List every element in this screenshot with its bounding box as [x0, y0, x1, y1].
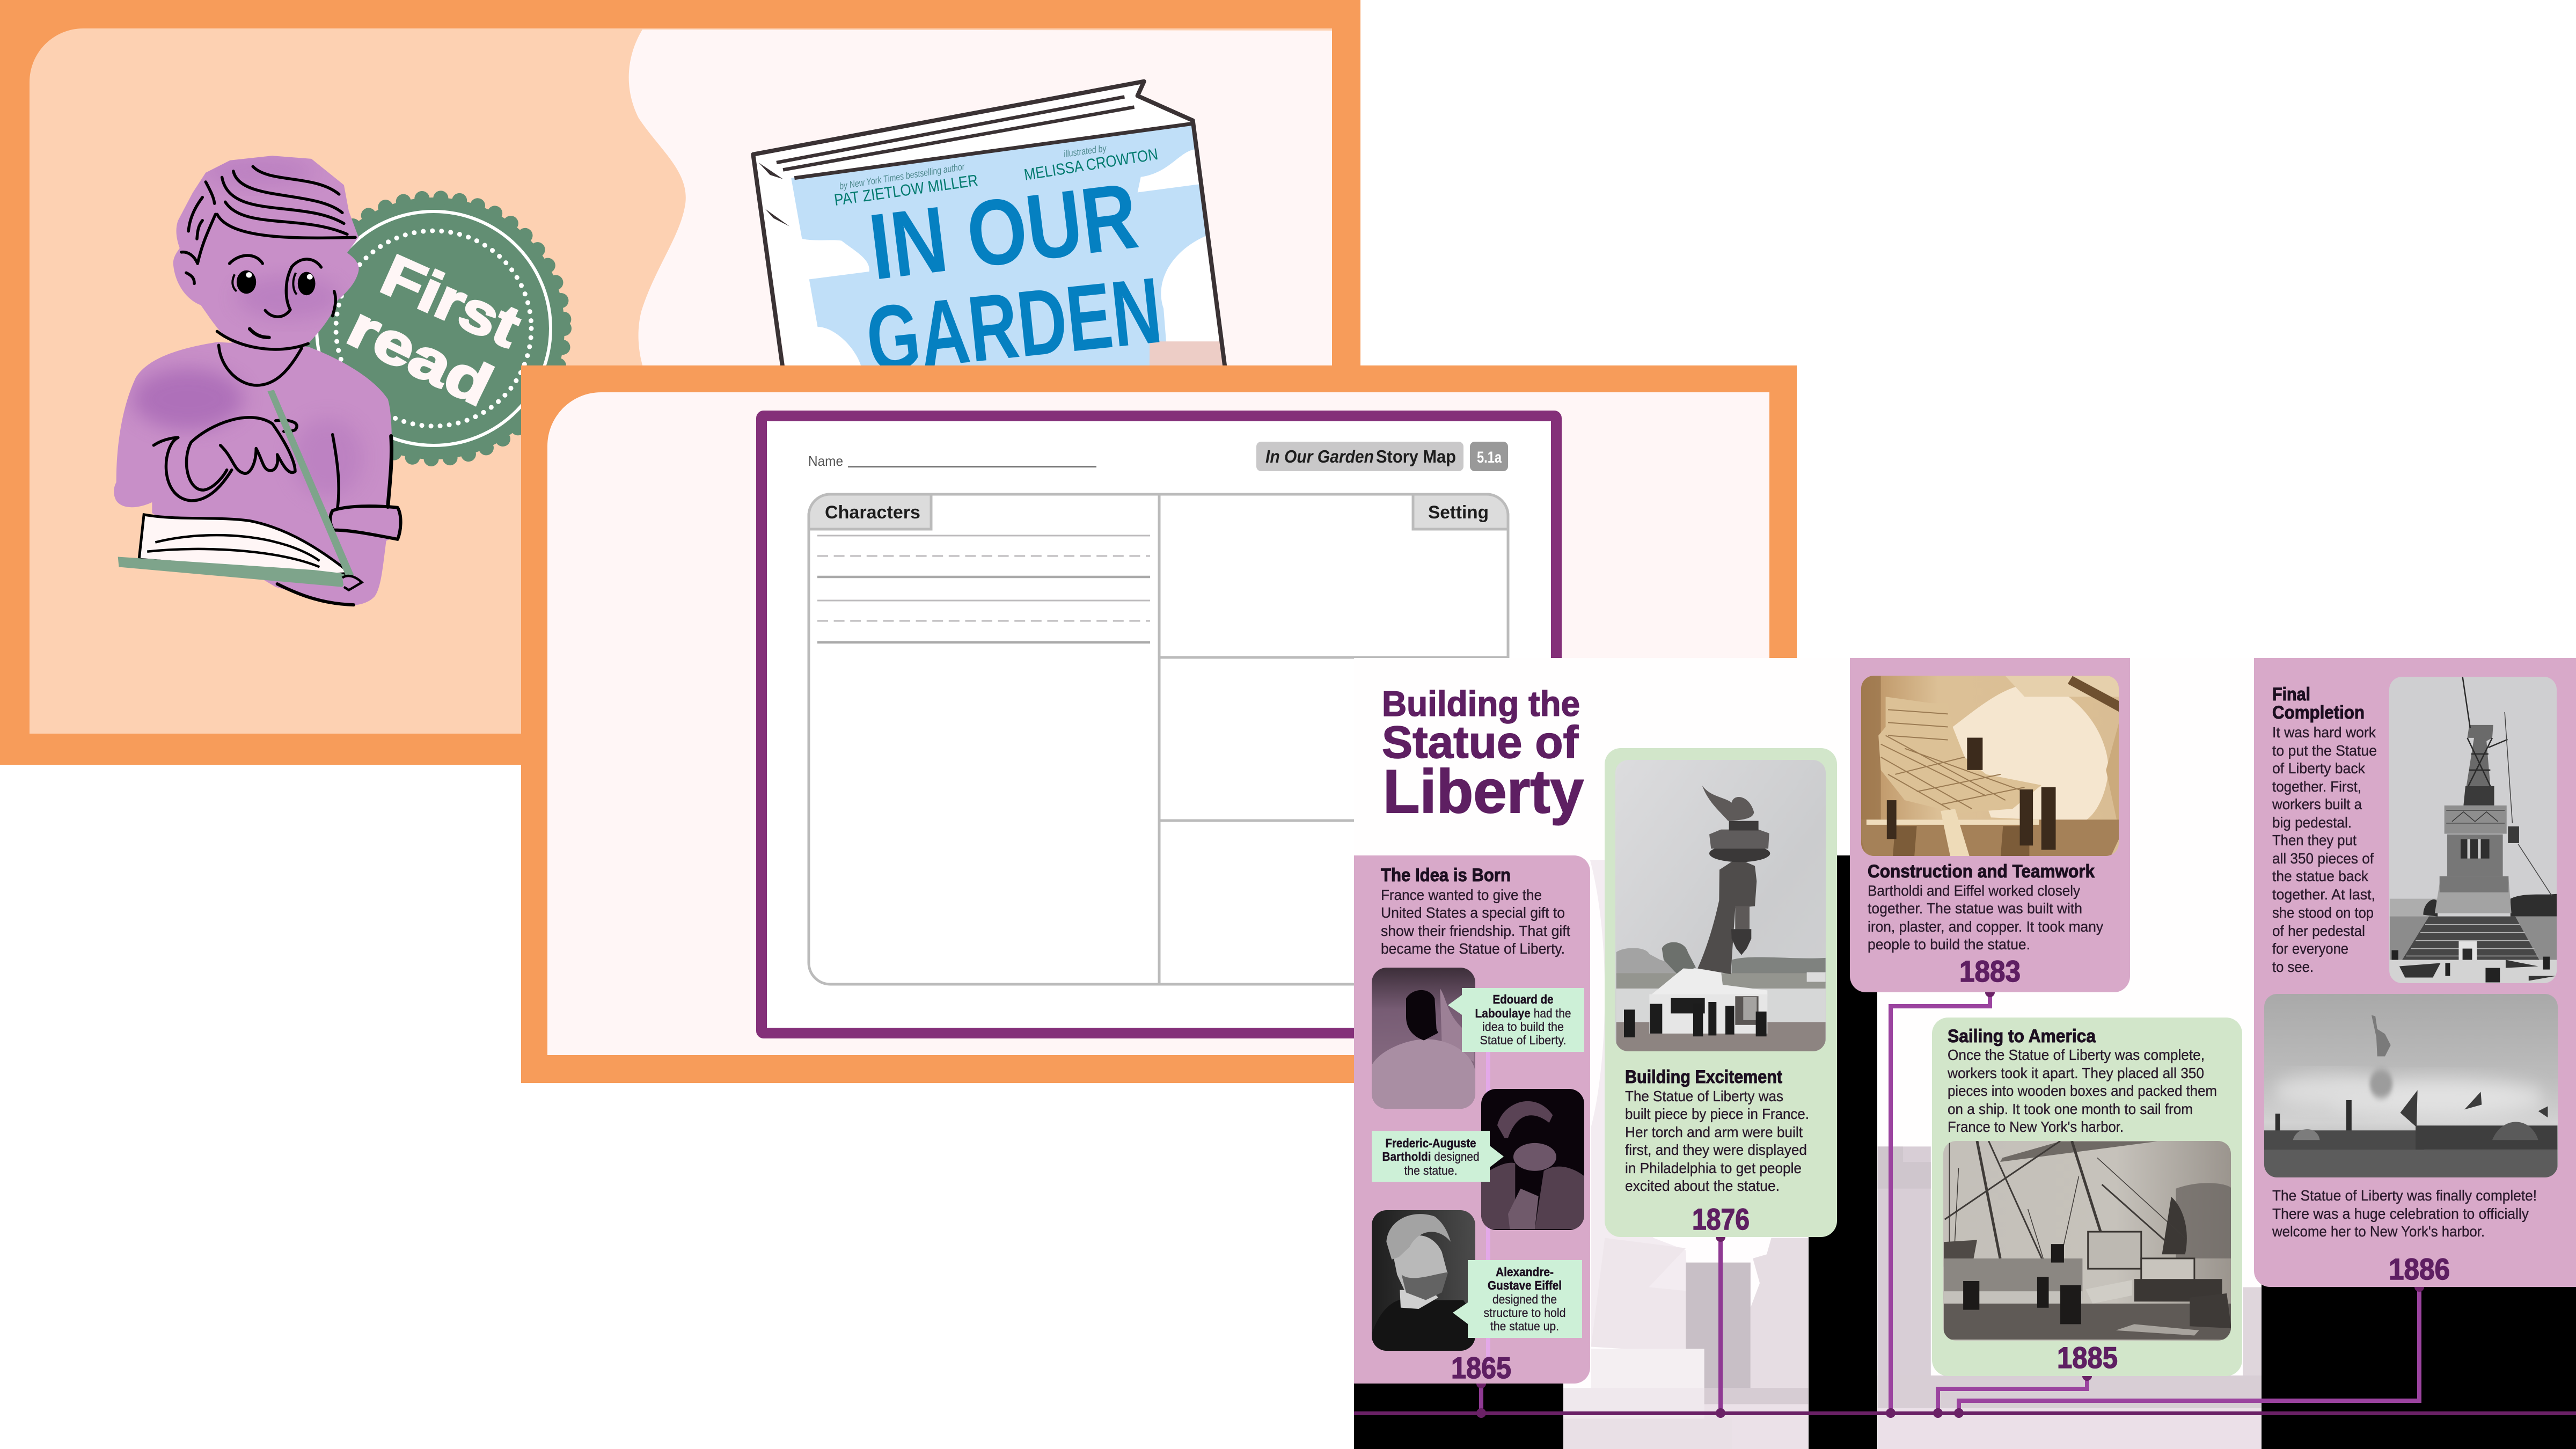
callout: Laboulaye — [1448, 988, 1584, 1052]
panel: worksheet frame — [762, 416, 1556, 1033]
illustration: In Our Garden book cover — [753, 82, 1225, 392]
black background blocks — [1354, 855, 2576, 1449]
callout: Laboulaye: Edouard de — [1493, 992, 1553, 1006]
body text: welcome her to New York's harbor. — [2272, 1223, 2485, 1240]
body text: show their friendship. That gift — [1381, 923, 1570, 939]
photo: workshop — [1861, 676, 2119, 857]
callout: Bartholdi: Bartholdi designed — [1382, 1150, 1479, 1163]
background skyline: statue side — [1563, 860, 1809, 1449]
heading: Final — [2272, 684, 2310, 705]
portrait: Laboulaye — [1372, 968, 1475, 1110]
body text: France to New York's harbor. — [1948, 1118, 2124, 1135]
card: 1885 sailing to America — [1932, 1018, 2242, 1376]
callout: Eiffel: structure to hold — [1483, 1306, 1566, 1320]
body text — [1625, 1088, 1809, 1194]
callout: Eiffel: Alexandre- — [1496, 1265, 1554, 1279]
illustration: In Our Garden book cover: GARDEN — [862, 258, 1166, 392]
callout: Laboulaye: idea to build the — [1482, 1020, 1564, 1034]
heading: The Idea is Born — [1381, 865, 1511, 885]
body text: Bartholdi and Eiffel worked closely — [1868, 882, 2080, 899]
body text — [2272, 724, 2377, 975]
title: Liberty — [1383, 758, 1584, 826]
year: 1883 — [1959, 954, 2021, 988]
photo: harbor celebration — [2264, 994, 2558, 1179]
illustration: In Our Garden book cover: IN OUR — [864, 164, 1143, 299]
tab: setting: Setting — [1428, 502, 1489, 523]
connector: 1876 — [1716, 1232, 1725, 1418]
body text: workers took it apart. They placed all 350 — [1947, 1065, 2204, 1081]
callout: Bartholdi: the statue. — [1404, 1163, 1458, 1177]
body text: Once the Statue of Liberty was complete, — [1948, 1046, 2205, 1063]
illustration: In Our Garden book cover: MELISSA CROWTON — [1023, 145, 1159, 184]
body text: of Liberty back — [2272, 760, 2366, 777]
callout: Eiffel: the statue up. — [1490, 1319, 1559, 1333]
body text: The Statue of Liberty was finally complete! — [2272, 1187, 2537, 1204]
callout: Eiffel — [1453, 1260, 1582, 1338]
card: 1883 construction and teamwork — [1850, 658, 2130, 992]
body text: There was a huge celebration to officially — [2272, 1205, 2529, 1222]
connector: 1886 — [1954, 1282, 2424, 1418]
heading: Completion — [2272, 702, 2365, 723]
worksheet number tag: 5.1a — [1477, 449, 1502, 466]
worksheet number tag — [1470, 442, 1508, 471]
callout: Bartholdi — [1372, 1131, 1504, 1182]
badge: first read: read — [338, 294, 502, 418]
illustration: In Our Garden book cover: illustrated by — [1063, 143, 1108, 159]
tab: characters: Characters — [825, 502, 920, 523]
heading: Sailing to America — [1948, 1026, 2096, 1046]
title: Statue of — [1382, 717, 1579, 767]
body text: excited about the statue. — [1625, 1177, 1780, 1194]
body text: she stood on top — [2272, 904, 2374, 921]
body text: big pedestal. — [2272, 814, 2352, 831]
body text: together. At last, — [2272, 886, 2375, 903]
body text: people to build the statue. — [1868, 936, 2030, 953]
photo: torch in Philadelphia — [1615, 760, 1826, 1052]
callout: Eiffel: designed the — [1492, 1292, 1557, 1306]
year: 1885 — [2057, 1341, 2118, 1374]
body text: first, and they were displayed — [1625, 1141, 1807, 1158]
callout: Laboulaye: Statue of Liberty. — [1480, 1033, 1566, 1047]
worksheet title tag: Story Map — [1376, 447, 1456, 466]
body text — [1381, 887, 1570, 957]
card: 1876 building excitement — [1605, 748, 1837, 1237]
worksheet title tag: In Our Garden — [1265, 447, 1374, 466]
connector: 1883 — [1886, 987, 1995, 1418]
body text: together. The statue was built with — [1868, 900, 2082, 917]
panel: Statue of Liberty timeline poster — [1354, 658, 2576, 1449]
photo: pedestal under construction — [2389, 677, 2557, 984]
heading: Construction and Teamwork — [1868, 861, 2095, 882]
name field: Name — [808, 453, 843, 469]
body text: together. First, — [2272, 778, 2361, 795]
year: 1876 — [1692, 1202, 1750, 1236]
body text: of her pedestal — [2272, 923, 2365, 939]
connector: 1865 — [1476, 1379, 1486, 1418]
panel: story map slide — [521, 365, 1797, 1083]
body text: Her torch and arm were built — [1625, 1124, 1803, 1140]
body text: to put the Statue — [2272, 742, 2377, 759]
body text — [1868, 882, 2103, 953]
portrait: Bartholdi — [1481, 1089, 1584, 1230]
body text: France wanted to give the — [1381, 887, 1542, 903]
eyes — [232, 270, 316, 295]
card: 1886 final completion — [2254, 658, 2576, 1287]
title — [1382, 684, 1584, 826]
background skyline: city side — [1878, 1146, 2262, 1449]
illustration: In Our Garden book cover: PAT ZIETLOW MILLER — [833, 172, 979, 209]
body text: in Philadelphia to get people — [1625, 1160, 1802, 1176]
body text: all 350 pieces of — [2272, 850, 2374, 867]
body text — [1947, 1046, 2217, 1135]
body text: the statue back — [2272, 868, 2369, 884]
badge: first read: First — [372, 241, 530, 360]
body text: iron, plaster, and copper. It took many — [1868, 918, 2103, 935]
writing lines — [817, 536, 1150, 642]
connector: 1885 — [1933, 1371, 2092, 1418]
card: 1865 the idea is born — [1354, 855, 1590, 1385]
body text: became the Statue of Liberty. — [1381, 940, 1565, 957]
body text: Then they put — [2272, 832, 2357, 848]
heading: Building Excitement — [1625, 1067, 1782, 1087]
worksheet title tag — [1256, 442, 1463, 471]
tab: setting — [1413, 494, 1508, 529]
callout: Eiffel: Gustave Eiffel — [1488, 1278, 1562, 1292]
body text: The Statue of Liberty was — [1625, 1088, 1783, 1104]
title: Building the — [1382, 684, 1580, 723]
body text — [2272, 1187, 2537, 1240]
badge: first read — [303, 197, 565, 459]
callout: Laboulaye: Laboulaye had the — [1475, 1006, 1571, 1020]
photo: ship engraving — [1943, 1141, 2231, 1341]
year: 1865 — [1451, 1351, 1511, 1385]
portrait: Eiffel — [1372, 1210, 1475, 1351]
body text: to see. — [2272, 958, 2314, 975]
body text: United States a special gift to — [1381, 904, 1565, 921]
body text: workers built a — [2272, 796, 2362, 813]
body text: on a ship. It took one month to sail from — [1948, 1101, 2193, 1117]
illustration: In Our Garden book cover: by New York Times bestselling author — [838, 161, 965, 192]
body text: It was hard work — [2272, 724, 2376, 741]
tab: characters — [809, 494, 931, 529]
body text: for everyone — [2272, 940, 2348, 957]
icon: boy reading a book — [114, 156, 401, 605]
timeline main line — [1354, 1411, 2576, 1415]
story map grid — [809, 494, 1508, 984]
callout: Bartholdi: Frederic-Auguste — [1386, 1136, 1476, 1150]
panel: first read slide — [0, 0, 1360, 765]
body text: built piece by piece in France. — [1625, 1106, 1809, 1122]
heading — [2272, 684, 2365, 723]
body text: pieces into wooden boxes and packed them — [1948, 1082, 2217, 1099]
year: 1886 — [2389, 1252, 2450, 1286]
